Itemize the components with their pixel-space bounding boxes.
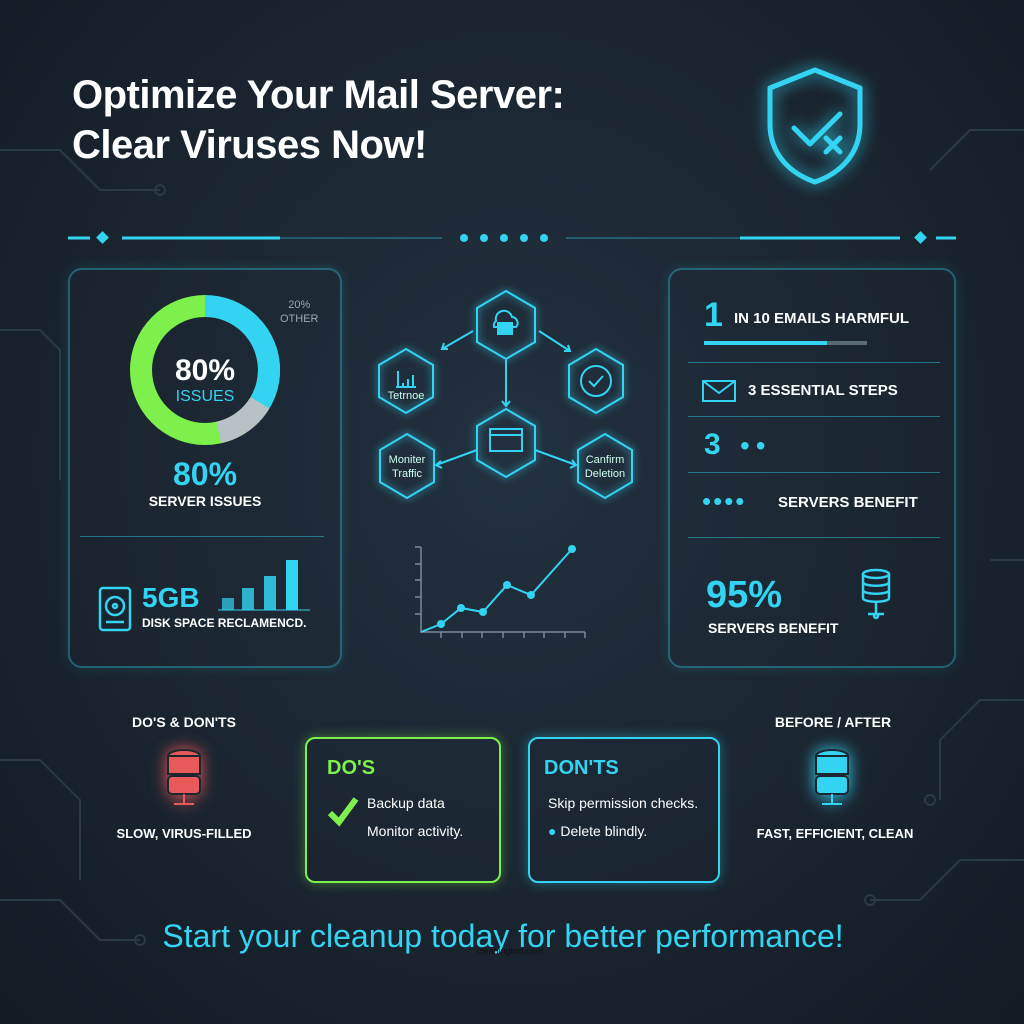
- hex diagram: Tetrnoe: [388, 390, 424, 402]
- donut label: 80%: [175, 354, 235, 387]
- hex diagram: Moniter: [389, 454, 426, 466]
- icon: shield: [756, 58, 874, 194]
- hex diagram: Canfirm: [586, 454, 624, 466]
- text: FAST, EFFICIENT, CLEAN: [757, 826, 913, 841]
- panel: right stats: IN 10 EMAILS HARMFUL: [734, 310, 909, 327]
- title: [72, 73, 564, 167]
- hex diagram: Traffic: [392, 468, 422, 480]
- panel: left stats: [68, 268, 342, 668]
- section: before/after label: BEFORE / AFTER: [775, 714, 891, 730]
- panel: don'ts: [528, 737, 720, 883]
- other label: 20%: [288, 299, 310, 311]
- panel: don'ts: DON'TS: [544, 757, 619, 779]
- panel: right stats: [668, 268, 956, 668]
- footer call to action: Start your cleanup today for better performance!: [162, 918, 844, 954]
- text: SLOW, VIRUS-FILLED: [116, 826, 252, 841]
- donut chart: [130, 295, 280, 445]
- panel: right stats: ••: [740, 430, 772, 461]
- panel: don'ts: ● Delete blindly.: [548, 823, 647, 839]
- panel: do's: Monitor activity.: [367, 823, 463, 839]
- other label: [280, 299, 318, 325]
- stat: 3 dots: 3: [704, 428, 721, 461]
- panel: don'ts: Skip permission checks.: [548, 795, 698, 811]
- stat: disk space: 5GB: [142, 582, 200, 613]
- hex diagram: Deletion: [585, 468, 625, 480]
- bar chart: [218, 560, 310, 610]
- panel: right stats: SERVERS BENEFIT: [778, 494, 918, 511]
- stat: server issues: [149, 456, 261, 509]
- icon: cyan database: [802, 737, 862, 814]
- panel: right stats: 3 ESSENTIAL STEPS: [748, 382, 898, 399]
- stat: servers benefit dots: ••••: [702, 486, 746, 516]
- donut label: ISSUES: [176, 388, 234, 405]
- icon: red database: [154, 737, 214, 814]
- panel: right stats: SERVERS BENEFIT: [708, 620, 838, 636]
- icon: envelope: [702, 380, 736, 402]
- stat: server issues: 80%: [173, 456, 237, 492]
- stat: 95%: 95%: [706, 574, 782, 616]
- panel: left stats: DISK SPACE RECLAMENCD.: [142, 616, 306, 630]
- divider: [68, 231, 956, 244]
- section: do's & don'ts label: DO'S & DON'TS: [132, 714, 236, 730]
- stat: 1 in 10: 1: [704, 296, 723, 334]
- icon: database: [862, 568, 890, 620]
- watermark: cleaningbro.com: [477, 946, 543, 956]
- title: Optimize Your Mail Server:: [72, 73, 564, 117]
- other label: OTHER: [280, 313, 318, 325]
- icon: check: [328, 797, 358, 827]
- stat: server issues: SERVER ISSUES: [149, 493, 261, 509]
- icon: disk: [98, 586, 132, 632]
- line chart: [415, 545, 586, 638]
- panel: do's: DO'S: [327, 757, 375, 779]
- title: Clear Viruses Now!: [72, 123, 427, 167]
- panel: do's: Backup data: [367, 795, 445, 811]
- panel: do's: [305, 737, 501, 883]
- hex diagram: [372, 286, 638, 504]
- donut label: [175, 354, 235, 405]
